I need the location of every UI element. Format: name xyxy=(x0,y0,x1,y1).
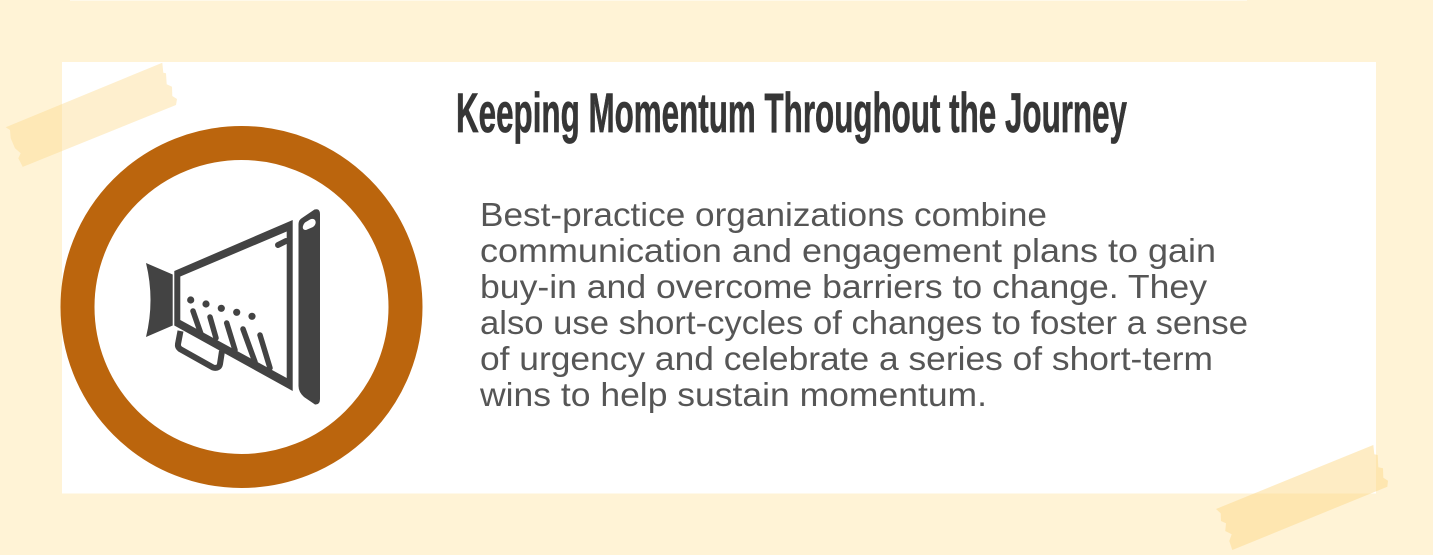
body text xyxy=(479,196,1248,413)
body text: of urgency and celebrate a series of short-term xyxy=(480,340,1213,377)
body text: also use short-cycles of changes to foster a sense xyxy=(480,304,1248,341)
megaphone horn outline xyxy=(174,220,293,391)
body text: communication and engagement plans to gain xyxy=(480,232,1216,269)
body text: buy-in and overcome barriers to change. They xyxy=(480,268,1208,305)
megaphone rim xyxy=(298,209,320,405)
tape: bottom right xyxy=(1216,445,1388,550)
megaphone mouthpiece xyxy=(146,263,173,337)
megaphone handle xyxy=(178,331,222,368)
white panel xyxy=(62,62,1376,494)
orange ring xyxy=(78,143,406,471)
sound dots xyxy=(187,296,256,320)
horn highlight stroke xyxy=(278,241,286,245)
body text: wins to help sustain momentum. xyxy=(479,376,987,413)
sound lines xyxy=(193,311,270,368)
body text: Best-practice organizations combine xyxy=(480,196,1047,233)
tape: top left xyxy=(6,63,177,168)
icon: megaphone xyxy=(146,209,320,405)
